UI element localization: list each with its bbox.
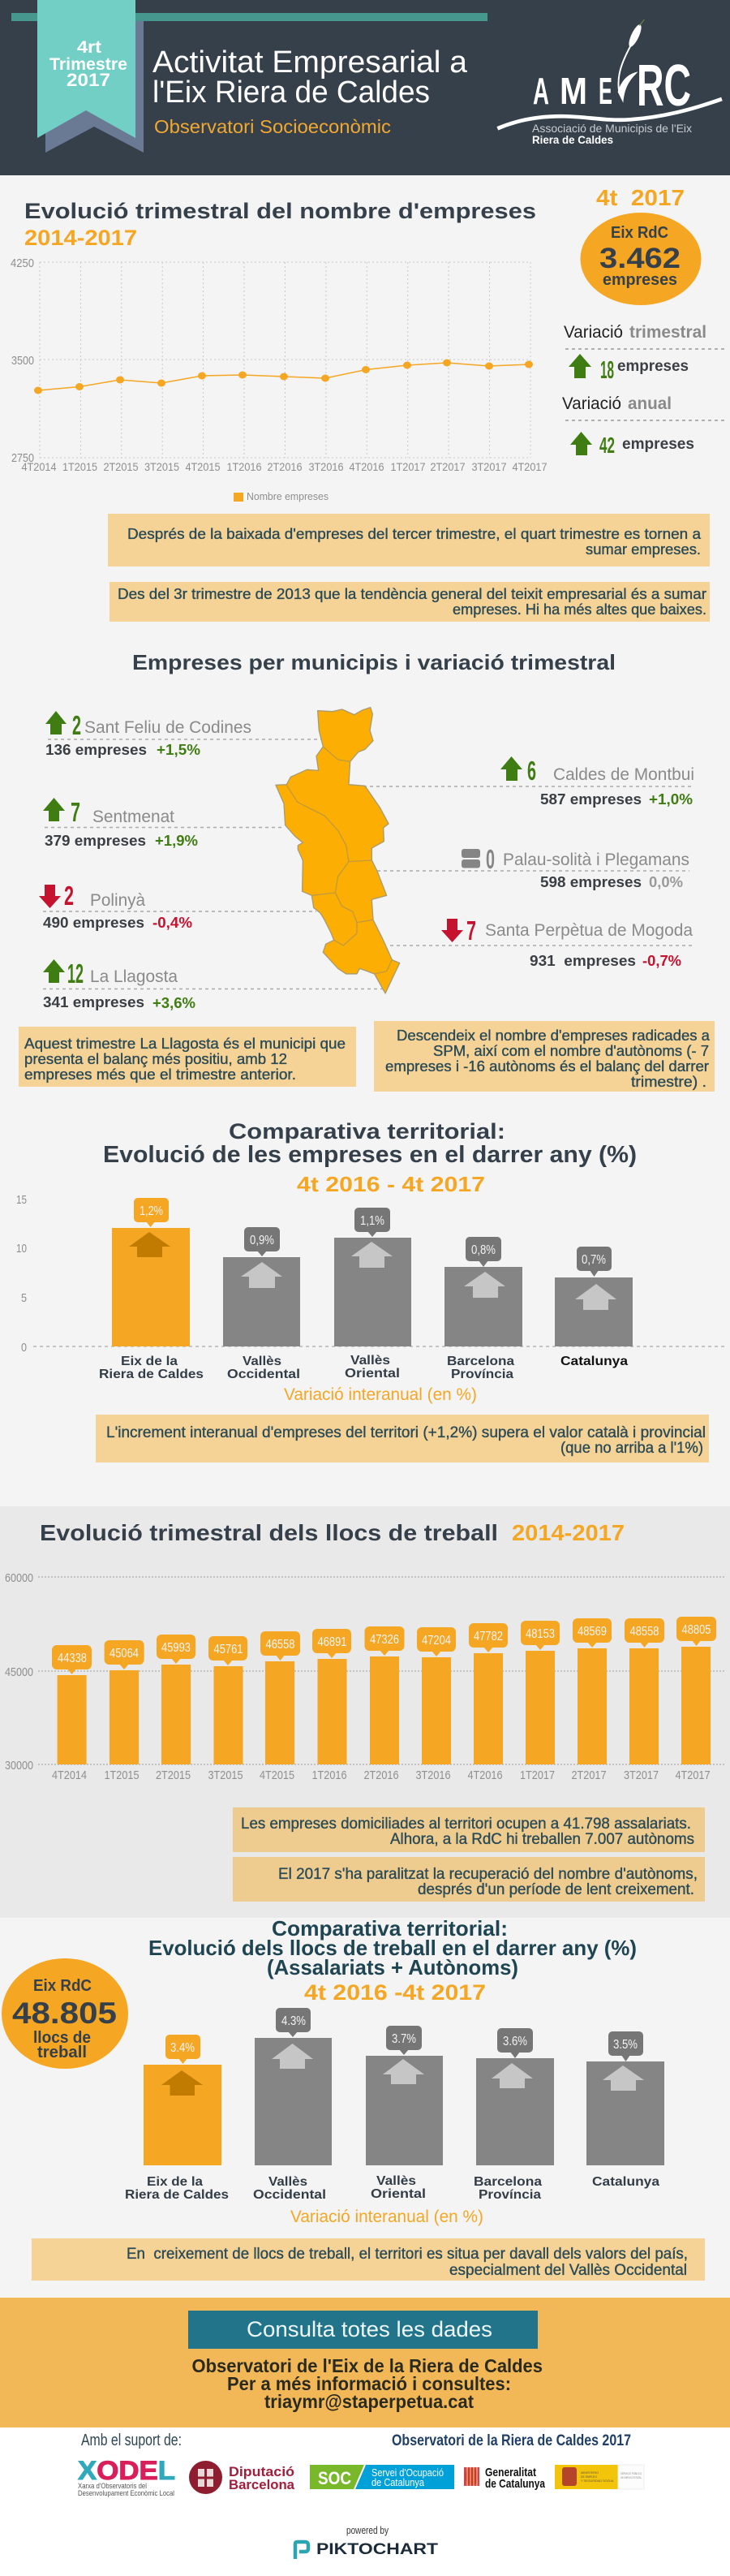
line chart: nombre empreses: 3T2016 xyxy=(308,460,344,473)
heading: comparativa llocs: 4t 2016 -4t 2017 xyxy=(304,1980,486,2005)
logo: Ministerio: DE EMPLEO xyxy=(581,2475,597,2479)
callout: autònoms: després d'un període de lent creixement. xyxy=(418,1881,694,1898)
logo: SOC: SOC xyxy=(318,2468,351,2488)
logo: XODEL: Xarxa d'Observatoris del xyxy=(78,2482,147,2490)
legend: Nombre empreses xyxy=(247,490,328,502)
bar chart: llocs de treball: 48153 xyxy=(526,1627,555,1641)
bar chart: llocs comparativa: Riera de Caldes xyxy=(125,2188,229,2202)
line chart: nombre empreses: 4250 xyxy=(11,256,34,270)
kpi: 3.462 empreses: empreses xyxy=(603,271,677,289)
logo: AMERC: Riera de Caldes xyxy=(532,133,613,146)
municipi: Polinyà: Polinyà xyxy=(90,891,145,910)
municipi: Sentmenat: 7 xyxy=(71,797,80,827)
callout: tendència: Des del 3r trimestre de 2013 que la tendència general del teixit empresarial és a sumar xyxy=(118,586,706,602)
bar chart: llocs de treball: 3T2016 xyxy=(415,1768,451,1782)
map: municipis xyxy=(276,708,400,993)
contact text xyxy=(191,2355,543,2412)
leader lines xyxy=(43,739,694,989)
kpi: 48.805 llocs de treball xyxy=(2,1958,128,2069)
logo: SOC: de Catalunya xyxy=(371,2476,425,2488)
bar chart: llocs de treball: 2T2017 xyxy=(571,1768,607,1782)
municipi: La Llagosta: La Llagosta xyxy=(90,967,178,986)
variació anual: Variació xyxy=(562,394,621,413)
callout: assalariats: Les empreses domiciliades al territori ocupen a 41.798 assalariats. xyxy=(241,1816,691,1833)
line chart: nombre empreses: 1T2016 xyxy=(227,460,262,473)
powered by Piktochart: powered by xyxy=(346,2524,389,2536)
municipi: Polinyà xyxy=(39,881,192,931)
line chart: nombre empreses: 3T2015 xyxy=(144,460,179,473)
line chart: nombre empreses: 3500 xyxy=(11,354,34,368)
bar chart: llocs comparativa: Província xyxy=(479,2188,541,2202)
line chart: nombre empreses: 1T2017 xyxy=(391,460,426,473)
bar chart: llocs comparativa: Barcelona xyxy=(474,2175,542,2189)
logo: AMERC xyxy=(497,19,722,146)
line chart: nombre empreses: 4T2015 xyxy=(185,460,221,473)
callout: increment interanual: (que no arriba a l'1%) xyxy=(560,1440,703,1457)
variació trimestral xyxy=(564,323,724,384)
bar chart: llocs de treball: 1T2016 xyxy=(311,1768,347,1782)
callout: creixement xyxy=(32,2238,705,2281)
bar chart: llocs de treball: 2T2015 xyxy=(156,1768,191,1782)
bar chart: llocs comparativa: Eix de la xyxy=(147,2175,203,2189)
municipi: La Llagosta: +3,6% xyxy=(152,995,195,1011)
bar chart: empreses: 0,9% xyxy=(250,1234,274,1247)
bar chart: empreses: 15 xyxy=(16,1193,27,1207)
municipi: Caldes de Montbui: Caldes de Montbui xyxy=(553,765,694,784)
title: l'Eix Riera de Caldes xyxy=(152,75,430,110)
kpi: 3.462 empreses xyxy=(581,185,701,305)
heading: evolució empreses xyxy=(24,199,536,250)
bar chart: llocs de treball: 4T2017 xyxy=(675,1768,711,1782)
subtitle: Observatori Socioeconòmic xyxy=(154,116,391,137)
municipi: Palau-solità i Plegamans: 0 xyxy=(486,844,495,874)
panel: llocs de treball xyxy=(0,1506,730,1918)
bar chart: llocs de treball: 47326 xyxy=(370,1633,399,1647)
logo: Diputació Barcelona: Barcelona xyxy=(229,2477,295,2492)
line chart: nombre empreses: 3T2017 xyxy=(472,460,507,473)
callout: La Llagosta: Aquest trimestre La Llagosta és el municipi que xyxy=(24,1036,346,1052)
logo: AMERC: RC xyxy=(637,54,691,118)
variació trimestral: Variació xyxy=(564,323,623,342)
bar chart: llocs comparativa xyxy=(125,2008,664,2226)
municipi: La Llagosta: 12 xyxy=(67,958,84,989)
bar chart: llocs de treball: 45064 xyxy=(110,1647,139,1661)
bar chart: empreses: Vallès xyxy=(243,1355,281,1368)
bar chart: empreses: 0,8% xyxy=(471,1243,496,1257)
municipi: Caldes de Montbui: 6 xyxy=(527,756,536,786)
municipi: Sentmenat: Sentmenat xyxy=(92,808,174,826)
bar chart: llocs comparativa: Vallès xyxy=(268,2175,307,2189)
logo: Ministerio: MINISTERIO xyxy=(581,2470,599,2475)
municipi: Polinyà: 2 xyxy=(64,881,74,911)
bar chart: llocs comparativa: 3.7% xyxy=(392,2032,416,2046)
powered by Piktochart: PIKTOCHART xyxy=(316,2541,438,2558)
callout: autònoms xyxy=(233,1857,705,1902)
bar chart: llocs comparativa: 3.4% xyxy=(170,2041,195,2055)
line chart: nombre empreses: 1T2015 xyxy=(62,460,97,473)
bar chart: llocs de treball: 30000 xyxy=(5,1759,33,1773)
logo: Diputació Barcelona xyxy=(189,2461,295,2494)
bar chart: llocs de treball: 45000 xyxy=(5,1665,33,1679)
callout: increment interanual: L'increment interanual d'empreses del territori (+1,2%) supera el valor català i provincial xyxy=(106,1424,706,1441)
bar chart: llocs de treball: 4T2016 xyxy=(467,1768,503,1782)
municipi: Polinyà: -0,4% xyxy=(152,915,192,931)
callout: baixada: Després de la baixada d'empreses del tercer trimestre, el quart trimestre es tornen a xyxy=(127,526,702,542)
bar chart: llocs de treball: 1T2015 xyxy=(104,1768,140,1782)
bar chart: llocs comparativa: Occidental xyxy=(253,2188,326,2202)
icon: arrow up xyxy=(570,432,592,455)
callout: SPM: trimestre) . xyxy=(631,1074,706,1090)
bar chart: llocs de treball: 47782 xyxy=(474,1630,503,1643)
bar chart: llocs de treball: 46891 xyxy=(318,1635,347,1649)
bar chart: empreses: Eix de la xyxy=(121,1355,178,1368)
logo: AMERC: A xyxy=(533,70,549,112)
line chart: nombre empreses xyxy=(11,256,548,502)
bar chart: empreses: Oriental xyxy=(345,1367,400,1381)
municipi: Sentmenat xyxy=(43,797,198,849)
municipi: La Llagosta xyxy=(43,958,195,1011)
bar chart: llocs de treball: 48558 xyxy=(629,1625,659,1639)
ribbon text: Trimestre xyxy=(49,55,127,74)
icon: arrow up xyxy=(569,354,591,378)
bar chart: llocs de treball: 60000 xyxy=(5,1571,33,1585)
logo: AMERC: E xyxy=(599,70,612,112)
bar chart: empreses: 10 xyxy=(16,1242,27,1256)
municipi: Sentmenat: 379 empreses xyxy=(45,833,146,849)
bar chart: llocs de treball: 2T2016 xyxy=(363,1768,399,1782)
municipi: Sant Feliu de Codines: 2 xyxy=(72,710,81,740)
bar chart: llocs de treball: 3T2015 xyxy=(208,1768,243,1782)
municipi: Caldes de Montbui: 587 empreses xyxy=(540,791,642,808)
bar chart: llocs comparativa: Vallès xyxy=(376,2174,416,2188)
line chart: nombre empreses: 2T2015 xyxy=(104,460,139,473)
heading: comparativa empreses: 4t 2016 - 4t 2017 xyxy=(297,1172,485,1196)
municipi: Sant Feliu de Codines: Sant Feliu de Codines xyxy=(84,718,251,737)
logo: Ministerio: Y SEGURIDAD SOCIAL xyxy=(581,2479,615,2483)
variació anual xyxy=(562,394,724,458)
logo: AMERC: Associació de Municipis de l'Eix xyxy=(532,122,692,135)
heading: comparativa empreses: Comparativa territorial: xyxy=(229,1119,505,1144)
bar chart: llocs de treball: 48569 xyxy=(578,1625,607,1639)
callout: increment interanual xyxy=(96,1415,709,1462)
municipi: Palau-solità i Plegamans: Palau-solità i Plegamans xyxy=(503,851,689,869)
logo: SOC: Servei d'Ocupació xyxy=(371,2466,444,2479)
variació trimestral: 18 xyxy=(600,355,614,384)
bar chart: llocs comparativa: 3.6% xyxy=(503,2035,527,2048)
callout: SPM: empreses i -16 autònoms és el balanç del darrer xyxy=(385,1058,709,1075)
callout: creixement: especialment del Vallès Occidental xyxy=(449,2262,687,2279)
logo: AMERC: M xyxy=(560,70,587,112)
callout: SPM: Descendeix el nombre d'empreses radicades a xyxy=(397,1027,711,1044)
municipi: Santa Perpètua de Mogoda: 7 xyxy=(466,915,476,946)
kpi: 48.805 llocs de treball: llocs de xyxy=(33,2029,91,2047)
contact text: Per a més informació i consultes: xyxy=(227,2373,511,2394)
bar chart: llocs de treball: 3T2017 xyxy=(624,1768,659,1782)
callout: La Llagosta: presenta el balanç més positiu, amb 12 xyxy=(24,1051,287,1067)
heading: comparativa empreses: Evolució de les empreses en el darrer any (%) xyxy=(103,1142,637,1168)
bar chart: llocs de treball: 47204 xyxy=(422,1634,451,1648)
contact text: triaymr@staperpetua.cat xyxy=(264,2391,474,2412)
logo: Diputació Barcelona: Diputació xyxy=(229,2464,294,2479)
title xyxy=(152,45,468,110)
municipi: Sant Feliu de Codines: 136 empreses xyxy=(45,742,147,758)
heading: evolució empreses: 2014-2017 xyxy=(24,226,137,250)
line chart: nombre empreses: 4T2017 xyxy=(513,460,548,473)
heading: evolució empreses: Evolució trimestral del nombre d'empreses xyxy=(24,199,536,223)
bar chart: llocs comparativa: 4.3% xyxy=(281,2014,306,2028)
kpi: 3.462 empreses: Eix RdC xyxy=(611,224,668,242)
callout: baixada: sumar empreses. xyxy=(586,541,701,558)
bar chart: llocs comparativa: Variació interanual (en %) xyxy=(290,2208,483,2226)
callout: tendència: empreses. Hi ha més altes que baixes. xyxy=(453,601,706,618)
panel: footer xyxy=(0,2427,730,2576)
municipi: Santa Perpètua de Mogoda: Santa Perpètua de Mogoda xyxy=(485,921,693,940)
logo: Ministerio: DE EMPLEO ESTATAL xyxy=(620,2476,642,2479)
callout: autònoms: El 2017 s'ha paralitzat la recuperació del nombre d'autònoms, xyxy=(278,1866,698,1883)
callout: assalariats: Alhora, a la RdC hi treballen 7.007 autònoms xyxy=(390,1831,694,1848)
bar chart: empreses: Barcelona xyxy=(447,1355,514,1368)
heading: municipis: Empreses per municipis i variació trimestral xyxy=(132,650,616,674)
bar chart: llocs comparativa: 3.5% xyxy=(613,2038,638,2052)
bar chart: llocs de treball: 45993 xyxy=(161,1641,191,1655)
bar chart: llocs de treball: 1T2017 xyxy=(520,1768,555,1782)
bar chart: empreses: 0,7% xyxy=(582,1253,606,1267)
heading: comparativa llocs: (Assalariats + Autònoms) xyxy=(267,1955,518,1979)
kpi: 3.462 empreses: 3.462 xyxy=(599,243,681,274)
observatori credit: Observatori de la Riera de Caldes 2017 xyxy=(392,2432,631,2449)
bar chart: empreses: Catalunya xyxy=(560,1355,628,1368)
line chart: nombre empreses: 4T2014 xyxy=(21,460,57,473)
logo: XODEL: XODEL xyxy=(78,2456,175,2485)
heading: comparativa llocs: Comparativa territorial: xyxy=(272,1916,508,1941)
kpi: 3.462 empreses: 4t 2017 xyxy=(596,185,685,210)
logo: Generalitat: de Catalunya xyxy=(485,2477,546,2491)
bar chart: empreses xyxy=(16,1193,724,1404)
bar chart: empreses: 1,2% xyxy=(140,1204,163,1218)
line chart: nombre empreses: 2T2017 xyxy=(430,460,466,473)
bar chart: llocs de treball xyxy=(5,1571,724,1782)
bar chart: empreses: 5 xyxy=(21,1291,27,1305)
callout: tendència xyxy=(110,582,710,622)
heading: comparativa llocs xyxy=(148,1916,637,2005)
bar chart: empreses: Vallès xyxy=(350,1354,390,1368)
support label: Amb el suport de: xyxy=(81,2432,182,2449)
bar chart: llocs de treball: 44338 xyxy=(58,1652,87,1665)
logo: XODEL: Desenvolupament Econòmic Local xyxy=(78,2489,174,2497)
callout: creixement: En creixement de llocs de treball, el territori es situa per davall dels valors del país, xyxy=(127,2246,688,2263)
contact text: Observatori de l'Eix de la Riera de Caldes xyxy=(191,2355,543,2376)
municipi: Santa Perpètua de Mogoda xyxy=(441,915,693,969)
heading: comparativa llocs: Evolució dels llocs de treball en el darrer any (%) xyxy=(148,1936,637,1960)
bar chart: llocs de treball: 4T2014 xyxy=(52,1768,87,1782)
bar chart: llocs de treball: 48805 xyxy=(681,1623,711,1637)
line chart: nombre empreses: 2T2016 xyxy=(268,460,303,473)
heading: llocs de treball: 2014-2017 xyxy=(512,1520,625,1545)
callout: SPM xyxy=(374,1021,715,1092)
logo: SOC xyxy=(310,2465,454,2489)
button: consulta xyxy=(188,2311,538,2349)
callout: baixada xyxy=(108,514,710,566)
variació trimestral: trimestral xyxy=(629,323,706,342)
line chart: nombre empreses: 2750 xyxy=(11,451,34,465)
bar chart: empreses: Occidental xyxy=(227,1368,300,1381)
callout: assalariats xyxy=(233,1807,705,1852)
kpi: 48.805 llocs de treball: treball xyxy=(37,2044,87,2061)
header panel xyxy=(0,0,730,175)
bar chart: empreses: 1,1% xyxy=(360,1214,384,1228)
logo: Ministerio: SERVICIO PÚBLICO xyxy=(620,2472,642,2475)
line chart: nombre empreses: 4T2016 xyxy=(349,460,384,473)
bar chart: llocs de treball: 45761 xyxy=(214,1643,243,1656)
logo: Ministerio xyxy=(555,2465,644,2489)
kpi: 48.805 llocs de treball: Eix RdC xyxy=(33,1977,92,1995)
municipi: La Llagosta: 341 empreses xyxy=(43,994,144,1010)
callout: SPM: SPM, així com el nombre d'autònoms (- 7 xyxy=(433,1043,709,1059)
municipi: Caldes de Montbui xyxy=(500,756,694,808)
bar chart: empreses: 0 xyxy=(21,1341,27,1355)
ribbon text: 4rt xyxy=(77,38,101,57)
bar chart: empreses: Província xyxy=(451,1368,513,1381)
bar chart: empreses: Riera de Caldes xyxy=(99,1368,204,1381)
bar chart: llocs comparativa: Catalunya xyxy=(592,2175,659,2189)
municipi: Sant Feliu de Codines: +1,5% xyxy=(157,742,200,758)
municipi: Caldes de Montbui: +1,0% xyxy=(649,791,693,808)
variació anual: anual xyxy=(628,394,672,413)
municipi: Palau-solità i Plegamans xyxy=(462,844,689,890)
ribbon text xyxy=(49,38,127,90)
variació anual: empreses xyxy=(622,436,694,453)
title: Activitat Empresarial a xyxy=(152,45,468,80)
heading: comparativa empreses xyxy=(103,1119,637,1196)
callout: La Llagosta xyxy=(19,1027,356,1087)
municipi: Palau-solità i Plegamans: 598 empreses xyxy=(540,874,642,890)
button: consulta: Consulta totes les dades xyxy=(247,2317,492,2341)
municipi: Santa Perpètua de Mogoda: -0,7% xyxy=(642,953,681,969)
municipi: Polinyà: 490 empreses xyxy=(43,915,144,931)
panel: contacte xyxy=(0,2298,730,2427)
logo: Generalitat: Generalitat xyxy=(485,2466,536,2479)
municipi: Santa Perpètua de Mogoda: 931 empreses xyxy=(530,953,636,969)
variació trimestral: empreses xyxy=(617,358,689,375)
callout: La Llagosta: empreses més que el trimestre anterior. xyxy=(24,1066,296,1083)
logo: Generalitat xyxy=(464,2466,546,2491)
bar chart: llocs de treball: 4T2015 xyxy=(260,1768,294,1782)
bar chart: empreses: Variació interanual (en %) xyxy=(284,1385,477,1404)
bar chart: llocs comparativa: Oriental xyxy=(371,2187,426,2201)
powered by Piktochart xyxy=(295,2524,438,2559)
ribbon text: 2017 xyxy=(67,70,110,90)
variació anual: 42 xyxy=(599,433,615,458)
kpi: 48.805 llocs de treball: 48.805 xyxy=(12,1997,117,2030)
municipi: Sant Feliu de Codines xyxy=(45,710,251,758)
municipi: Palau-solità i Plegamans: 0,0% xyxy=(649,874,683,890)
bar chart: llocs de treball: 46558 xyxy=(266,1638,295,1652)
logo: XODEL xyxy=(78,2456,175,2497)
municipi: Sentmenat: +1,9% xyxy=(155,833,198,849)
heading: llocs de treball: Evolució trimestral dels llocs de treball xyxy=(40,1520,498,1545)
